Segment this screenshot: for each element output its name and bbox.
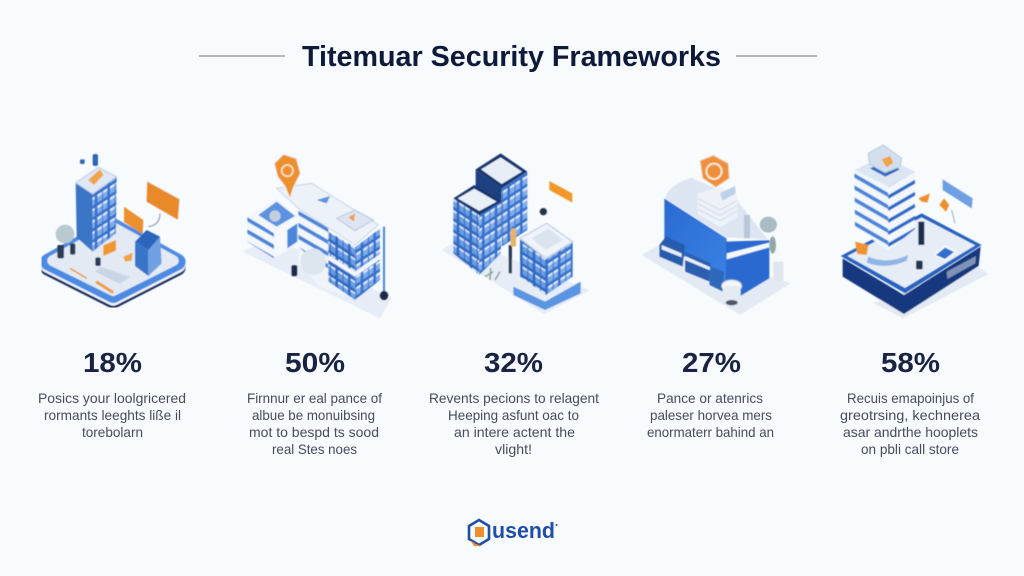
stat 1: torebolarn	[82, 424, 143, 440]
plant and bollards	[56, 225, 133, 284]
illustration 4: curved blue building	[642, 155, 791, 315]
stat 3: an intere actent the	[454, 424, 575, 440]
stat 5: on pbli call store	[861, 441, 959, 457]
front tower	[453, 185, 501, 275]
orange hex sign	[700, 155, 729, 187]
left wing	[247, 198, 298, 258]
illustration 5: high rise on navy plinth	[841, 145, 988, 318]
plant	[760, 217, 777, 254]
tower	[76, 154, 117, 252]
central stack	[697, 186, 750, 238]
illustration 3: twin towers	[442, 153, 590, 314]
stat 3: Heeping asfunt oac to	[448, 407, 579, 423]
stat 1: Posics your loolgricered	[38, 390, 186, 406]
stat 1: 18%	[83, 347, 142, 378]
front low building	[513, 223, 581, 310]
orange accents and blue sign	[918, 179, 973, 223]
logo: usend	[492, 518, 555, 543]
figure and plant	[485, 208, 547, 280]
stat 3: vlight!	[495, 441, 532, 457]
stat 5: 58%	[881, 347, 940, 378]
walls	[664, 198, 769, 298]
stat 1: rormants leeghts liße il	[44, 407, 181, 423]
stat 2: albue be monuibsing	[252, 407, 375, 423]
stat 3	[429, 347, 599, 457]
stat 5: Recuis emapoinjus of	[847, 390, 974, 406]
orange pin	[274, 154, 301, 199]
stat 2: real Stes noes	[272, 441, 357, 457]
stat 4: paleser horvea mers	[650, 407, 772, 423]
stat 2: Firnnur er eal pance of	[247, 390, 382, 406]
plinth	[841, 213, 982, 314]
orange path	[70, 268, 113, 293]
stat 5	[840, 347, 980, 457]
stat 4: 27%	[682, 347, 741, 378]
stat 2: mot to bespd ts sood	[249, 424, 379, 440]
logo	[469, 518, 558, 546]
roof	[664, 177, 769, 240]
back tower	[476, 153, 527, 247]
stat 4	[647, 347, 774, 440]
high rise	[854, 145, 915, 251]
title with side rules: Titemuar Security Frameworks	[302, 41, 721, 73]
signs	[103, 181, 180, 256]
orange flag	[549, 181, 572, 203]
right block	[328, 229, 380, 300]
illustration 1: tower on rounded platform	[48, 154, 180, 300]
stat 3: Revents pecions to relagent	[429, 390, 599, 406]
front cabinets	[659, 237, 783, 305]
stat 2: 50%	[285, 347, 345, 378]
stat 1	[38, 347, 186, 440]
stat 2	[247, 347, 382, 457]
stat 5: asar andrthe hooplets	[843, 424, 978, 440]
small kiosk	[135, 230, 162, 276]
illustration 2: long office building with pin	[243, 154, 392, 318]
stat 4: enormaterr bahind an	[647, 424, 774, 440]
stat 3: 32%	[484, 347, 543, 378]
deck details	[855, 222, 957, 269]
stat 5: greotrsing, kechnerea	[840, 407, 980, 423]
pole and bollard	[291, 227, 388, 300]
stat 4: Pance or atenrics	[657, 390, 763, 406]
center body	[277, 183, 378, 307]
